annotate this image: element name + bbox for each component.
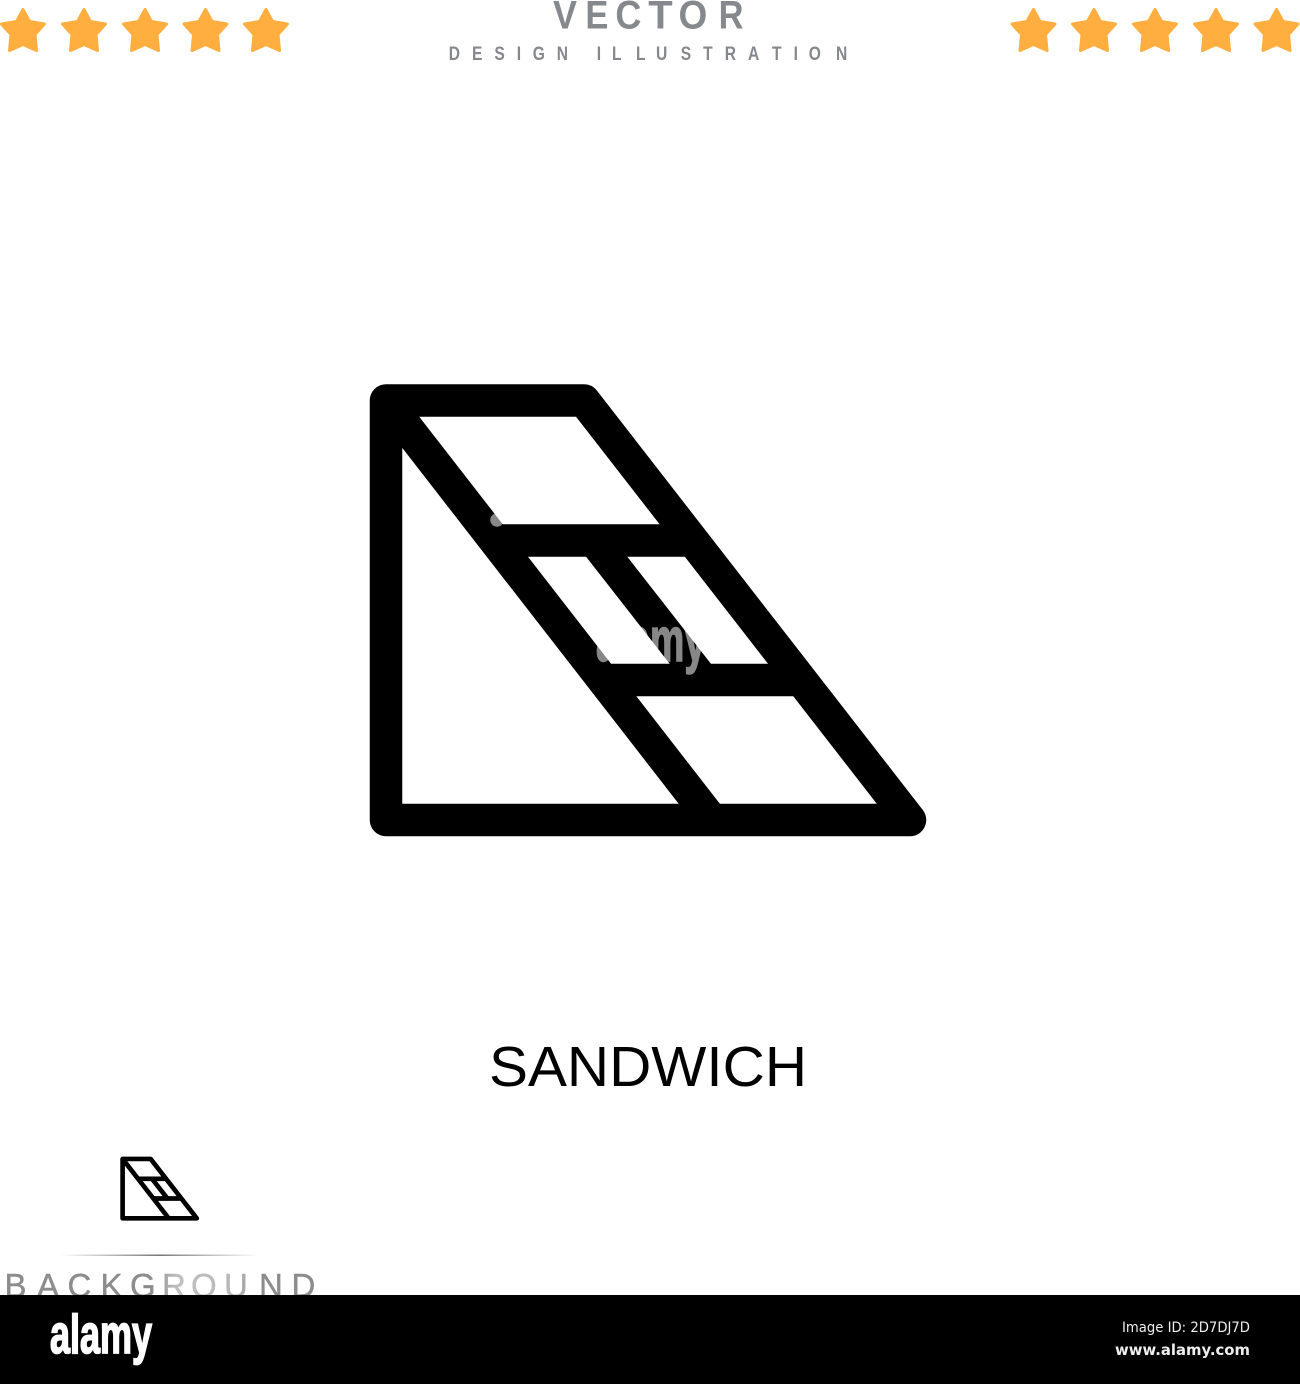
divider rule	[60, 1254, 258, 1256]
watermark: alamy overlay	[491, 514, 706, 675]
icon: sandwich main	[386, 400, 910, 820]
stars: right rating	[1012, 10, 1298, 50]
footer logo: alamy: alamy	[50, 1303, 152, 1365]
icon: sandwich small	[123, 1159, 197, 1218]
heading: vector	[553, 0, 744, 38]
footer: image id: Image ID: 2D7DJ7D	[1122, 1320, 1250, 1336]
stars: left rating	[2, 10, 288, 50]
footer bar	[0, 1295, 1300, 1384]
watermark: alamy overlay: alamy	[596, 606, 706, 675]
subheading: design illustration: DESIGN ILLUSTRATION	[0, 42, 847, 64]
label: background: BACKGROUND	[4, 1267, 315, 1304]
title: sandwich: SANDWICH	[489, 1035, 807, 1099]
footer: website: www.alamy.com	[1115, 1341, 1250, 1359]
